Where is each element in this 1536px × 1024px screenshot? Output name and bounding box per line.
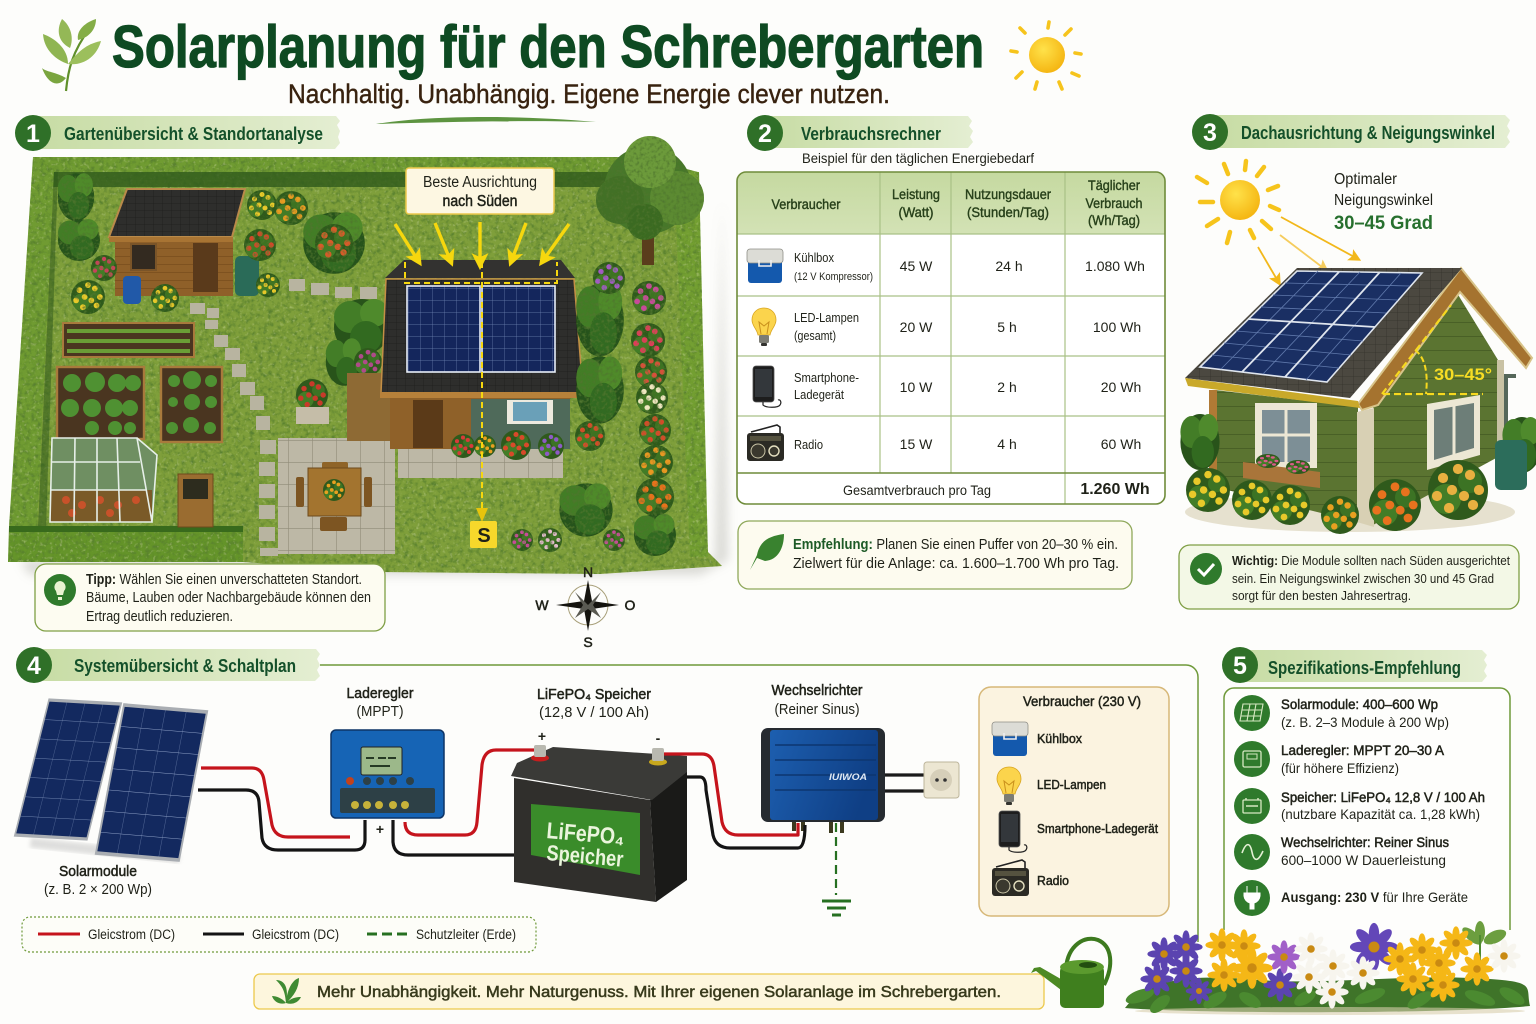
section 5 heading: 5 <box>1233 652 1247 680</box>
long vegetable bed <box>63 323 194 357</box>
compass rose: S <box>583 634 593 650</box>
load: cool box <box>992 722 1082 756</box>
angle marks: 30–45° <box>1434 365 1492 384</box>
row: Radio: 60 Wh <box>1101 436 1141 452</box>
section 4 heading: 4 <box>27 652 41 680</box>
legend: Gleicstrom (DC) <box>88 927 175 942</box>
table: energy use <box>737 172 1165 504</box>
corner tree <box>596 136 704 265</box>
positive terminal: + <box>538 728 546 744</box>
load: radio <box>992 860 1069 896</box>
load: cool box: Kühlbox <box>1037 731 1082 746</box>
spec: modules <box>1234 695 1449 731</box>
front window <box>1255 403 1317 468</box>
table header: (Watt) <box>898 204 934 220</box>
icon: watering can <box>1031 939 1110 1008</box>
label: S marker: S <box>477 525 491 547</box>
text: optimal tilt angle <box>1334 171 1433 234</box>
row: Kühlbox: (12 V Kompressor) <box>794 271 873 283</box>
front wall <box>1215 390 1358 522</box>
section 2 heading: 2 <box>758 120 772 148</box>
compass rose: W <box>535 597 549 613</box>
row: Smartphone-Ladegerät: 10 W <box>900 379 933 395</box>
row: LED-Lampen: 20 W <box>900 319 933 335</box>
section 1 heading: 1 <box>26 120 40 148</box>
load: phone charger <box>999 811 1158 852</box>
spec: modules: (z. B. 2–3 Module à 200 Wp) <box>1281 714 1449 730</box>
stepping stones <box>190 279 377 556</box>
label: solar modules: Solarmodule <box>59 864 137 880</box>
label: S marker <box>470 521 497 548</box>
callout: best orientation: Beste Ausrichtung <box>423 174 537 191</box>
roof <box>1185 268 1462 398</box>
row: Kühlbox: 45 W <box>900 258 933 274</box>
section 3 heading <box>1192 114 1510 150</box>
table header: Verbraucher <box>772 196 841 212</box>
solar modules <box>1200 271 1422 382</box>
frame: system panel outline <box>320 665 1198 942</box>
shrubs at house <box>296 299 390 424</box>
callout: tip: Ertrag deutlich reduzieren. <box>86 609 233 625</box>
terrace stone strip <box>398 448 563 478</box>
row: Kühlbox: 24 h <box>995 258 1023 274</box>
inverter <box>761 728 925 833</box>
row: Smartphone-Ladegerät: Smartphone- <box>794 371 859 385</box>
spec: output: Ausgang: 230 V für Ihre Geräte <box>1281 889 1468 905</box>
garden table <box>296 462 372 531</box>
shrubs west <box>58 173 365 314</box>
inverter: IUIWOA <box>829 772 867 783</box>
battery <box>511 728 687 902</box>
spec: storage: (nutzbare Kapazität ca. 1,28 kWh) <box>1281 806 1480 822</box>
row: total: 1.260 Wh <box>1080 481 1150 498</box>
text: optimal tilt angle: Neigungswinkel <box>1334 192 1433 209</box>
label: solar modules <box>44 864 152 898</box>
callout: recommendation: Zielwert für die Anlage: ca. 1.600–1.700 Wh pro Tag. <box>793 556 1119 572</box>
section 1 heading: Gartenübersicht & Standortanalyse <box>64 124 323 144</box>
load: lamps <box>997 767 1106 805</box>
wiring: DC red <box>201 750 798 837</box>
battery label: Speicher <box>546 840 625 872</box>
callout: important: Wichtig: Die Module sollten nach Süden ausgerichtet <box>1232 553 1510 568</box>
spec: output <box>1234 880 1468 916</box>
section 5 heading <box>1222 647 1487 683</box>
flower border east <box>511 262 676 556</box>
row: Smartphone-Ladegerät: 20 Wh <box>1101 379 1141 395</box>
table header: Verbrauch <box>1086 195 1142 211</box>
right hedge <box>674 172 708 557</box>
labels: components: Wechselrichter <box>772 683 863 699</box>
row: Radio: 4 h <box>997 436 1017 452</box>
row: total <box>843 481 1150 498</box>
left hedge <box>9 157 54 528</box>
spec: modules: Solarmodule: 400–600 Wp <box>1281 696 1438 712</box>
battery label <box>531 804 640 875</box>
house wall <box>390 397 570 449</box>
callout: tip: Bäume, Lauben oder Nachbargebäude können den <box>86 590 371 606</box>
text: optimal tilt angle: 30–45 Grad <box>1334 213 1433 234</box>
load: lamps: LED-Lampen <box>1037 777 1106 792</box>
section 5 heading: Spezifikations-Empfehlung <box>1268 658 1461 678</box>
row: Radio <box>747 425 1141 461</box>
subheading: example: Beispiel für den täglichen Energiebedarf <box>802 150 1034 166</box>
icon: sun with rays <box>1197 161 1279 243</box>
arrows: sun incidence <box>395 222 569 265</box>
legend <box>22 917 536 952</box>
spec: controller: (für höhere Effizienz) <box>1281 760 1399 776</box>
labels: components: Laderegler <box>346 686 414 702</box>
compass rose: N <box>583 564 593 580</box>
callout: tip: Tipp: Wählen Sie einen unverschatteten Standort. <box>86 572 362 588</box>
rain pipe and barrel <box>1506 376 1516 445</box>
compass rose: O <box>625 597 636 613</box>
spec: storage: Speicher: LiFePO₄ 12,8 V / 100 Ah <box>1281 789 1485 805</box>
row: total: Gesamtverbrauch pro Tag <box>843 482 991 498</box>
planters at house <box>451 430 564 460</box>
callout: best orientation <box>406 168 554 214</box>
icon: leaf sprig <box>42 19 101 91</box>
table header: Täglicher <box>1088 177 1140 193</box>
patio <box>278 438 395 554</box>
text: optimal tilt angle: Optimaler <box>1334 171 1397 188</box>
callout: important <box>1179 545 1519 609</box>
charge controller <box>331 730 444 837</box>
table header: (Stunden/Tag) <box>967 204 1049 220</box>
row: LED-Lampen: 5 h <box>997 319 1017 335</box>
row: LED-Lampen: (gesamt) <box>794 329 836 343</box>
callout: important: sein. Ein Neigungswinkel zwischen 30 und 45 Grad <box>1232 571 1494 586</box>
panel: garden map <box>8 136 728 575</box>
labels: components: (12,8 V / 100 Ah) <box>539 705 649 721</box>
rain barrels <box>123 256 259 304</box>
shed <box>109 189 245 296</box>
garden shadow <box>20 200 728 575</box>
banner: closing message <box>254 974 1044 1009</box>
battery label: LiFePO₄ <box>546 817 626 850</box>
gable wall <box>1373 293 1498 525</box>
icon: ground symbol <box>822 901 851 915</box>
row: Smartphone-Ladegerät <box>753 366 1141 407</box>
labels: components: (MPPT) <box>356 704 404 720</box>
row: Smartphone-Ladegerät: Ladegerät <box>794 388 844 402</box>
title: Solarplanung für den Schrebergarten <box>112 14 984 80</box>
positive terminal <box>531 728 549 762</box>
illustration: flower border <box>1124 921 1530 1016</box>
lawn <box>30 175 722 574</box>
gable window <box>1427 395 1480 470</box>
panel: 230 V loads: Verbraucher (230 V) <box>1023 693 1141 709</box>
charge controller: + <box>376 821 384 837</box>
negative terminal <box>649 730 667 766</box>
flower box <box>1243 462 1320 488</box>
icon: sun <box>1011 22 1081 89</box>
row: Radio: Radio <box>794 438 823 452</box>
panel: 230 V loads <box>979 687 1169 916</box>
top hedge <box>33 157 698 192</box>
solar modules <box>15 700 207 863</box>
table header: (Wh/Tag) <box>1088 212 1140 228</box>
callout: best orientation: nach Süden <box>442 193 518 210</box>
row: Kühlbox: Kühlbox <box>794 251 835 265</box>
row: LED-Lampen: 100 Wh <box>1093 319 1141 335</box>
vegetable bed left <box>57 367 144 439</box>
row: Smartphone-Ladegerät: 2 h <box>997 379 1017 395</box>
wiring: protective earth <box>835 823 837 895</box>
arrow: south direction <box>476 508 488 522</box>
compass rose <box>535 564 636 650</box>
garden house <box>347 260 584 449</box>
negative terminal: - <box>656 730 661 746</box>
vegetable bed right <box>161 367 222 442</box>
roof <box>385 260 575 278</box>
spec: inverter: 600–1000 W Dauerleistung <box>1281 852 1446 868</box>
greenhouse <box>50 438 157 522</box>
row: LED-Lampen: LED-Lampen <box>794 311 859 325</box>
section 4 heading <box>16 647 320 683</box>
panel: specifications <box>1224 688 1510 930</box>
table header: Leistung <box>892 186 940 202</box>
illustration: house with panels <box>1180 268 1536 534</box>
table header <box>772 177 1142 228</box>
wiring: DC black <box>198 777 805 855</box>
load: radio: Radio <box>1037 873 1069 888</box>
spec: controller: Laderegler: MPPT 20–30 A <box>1281 742 1445 758</box>
shrubs around house <box>1180 414 1220 470</box>
callout: recommendation: Empfehlung: Planen Sie einen Puffer von 20–30 % ein. <box>793 537 1118 553</box>
label: solar modules: (z. B. 2 × 200 Wp) <box>44 882 152 898</box>
callout: recommendation <box>738 521 1132 589</box>
orientation dashed guides <box>405 262 557 508</box>
solar panels on roof <box>407 286 480 372</box>
labels: components <box>346 683 863 721</box>
subtitle: Nachhaltig. Unabhängig. Eigene Energie clever nutzen. <box>288 79 890 109</box>
row: Kühlbox: 1.080 Wh <box>1085 258 1145 274</box>
labels: components: (Reiner Sinus) <box>774 702 860 718</box>
spec: storage <box>1234 788 1485 824</box>
legend: Gleicstrom (DC) <box>252 927 339 942</box>
row: Radio: 15 W <box>900 436 933 452</box>
corner post <box>1357 408 1374 527</box>
gable roof trim <box>1358 268 1532 410</box>
section 2 heading <box>747 115 973 151</box>
banner: closing message: Mehr Unabhängigkeit. Mehr Naturgenuss. Mit Ihrer eigenen Solaranlage im Schrebergarten. <box>317 984 1001 1001</box>
labels: components: LiFePO₄ Speicher <box>537 687 651 703</box>
callout: important: sorgt für den besten Jahresertrag. <box>1232 588 1411 603</box>
section 4 heading: Systemübersicht & Schaltplan <box>74 656 296 676</box>
decorative brush stroke under subtitle <box>376 117 596 124</box>
compost box <box>178 474 213 527</box>
angle marks <box>1382 305 1492 394</box>
row: LED-Lampen <box>752 308 1141 346</box>
spec: inverter <box>1234 834 1449 870</box>
terrace <box>347 373 391 441</box>
spec: inverter: Wechselrichter: Reiner Sinus <box>1281 834 1449 850</box>
section 3 heading: 3 <box>1203 119 1217 147</box>
spec: controller <box>1234 741 1445 777</box>
section 1 heading <box>15 115 340 151</box>
arrows: sun on roof <box>1258 217 1358 283</box>
icon: wall socket <box>924 762 959 798</box>
row: Kühlbox <box>747 249 1145 283</box>
section 2 heading: Verbrauchsrechner <box>801 124 941 144</box>
legend: Schutzleiter (Erde) <box>416 927 516 942</box>
ground <box>1185 492 1515 532</box>
table header: Nutzungsdauer <box>965 186 1051 202</box>
callout: tip <box>35 564 385 631</box>
load: phone charger: Smartphone-Ladegerät <box>1037 821 1158 836</box>
bottom hedge <box>8 527 243 562</box>
